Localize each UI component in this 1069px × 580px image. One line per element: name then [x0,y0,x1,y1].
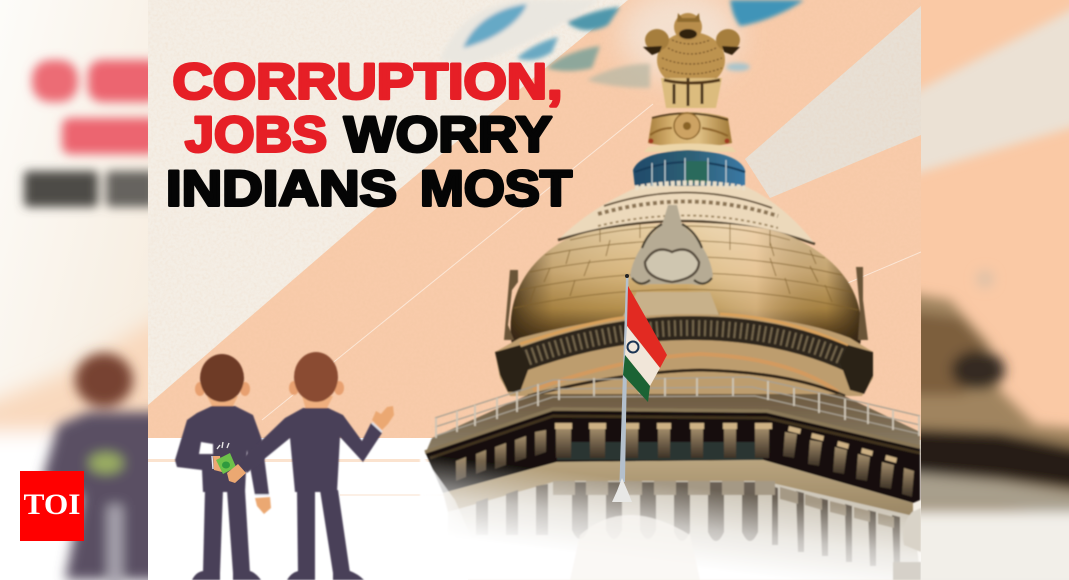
lower wall and columns [448,481,921,580]
lion head right [716,29,740,51]
white fade over building base [420,450,930,580]
title line 2 [185,106,552,162]
legs [661,78,722,108]
pilaster right [856,267,868,340]
paper grain [148,0,918,391]
TOI logo: TOI [24,488,80,521]
banknote and hand [212,442,246,483]
small pediment [570,515,700,580]
dome pedestal [622,292,720,318]
illustration: right man passing cash [238,352,394,580]
title line 3: INDIANS [166,160,397,216]
title line 3: MOST [420,160,572,216]
title line 2: WORRY [344,106,552,162]
illustration: left man hiding money [175,354,271,580]
railing terrace [425,377,920,454]
blue glass drum [633,150,745,188]
entablature beam [443,460,913,516]
lion head left [645,29,669,51]
head [195,354,250,408]
paper background [148,0,921,580]
raised hand [372,406,394,430]
right edge statue [893,508,921,580]
central poster panel [148,0,930,580]
title [166,54,572,216]
title line 2: JOBS [185,106,327,162]
carved frieze band [495,314,873,396]
title line 1: CORRUPTION, [172,54,562,110]
suit [175,406,269,580]
white cuff [372,423,382,432]
right hand [255,497,271,514]
head [289,352,344,410]
white floor [148,438,468,580]
peach rays [148,0,921,440]
thin diagonal lines [262,104,921,420]
suit [238,408,382,580]
capital base [644,112,736,152]
TOI logo [20,471,84,541]
dome [504,223,868,345]
blurred left backdrop [0,0,148,580]
flag pole and Indian tricolour [612,274,667,502]
lion capital emblem [643,13,740,108]
building: Vidhana Soudha [420,13,930,580]
upper ring [558,183,815,244]
blurred right backdrop [921,0,1069,580]
title line 3 [166,160,572,216]
ornamental cartouche [630,205,713,285]
dark eaves with brackets [425,408,920,503]
sky and clouds [440,0,804,88]
lion head centre [673,12,703,36]
pilaster left [504,270,518,340]
